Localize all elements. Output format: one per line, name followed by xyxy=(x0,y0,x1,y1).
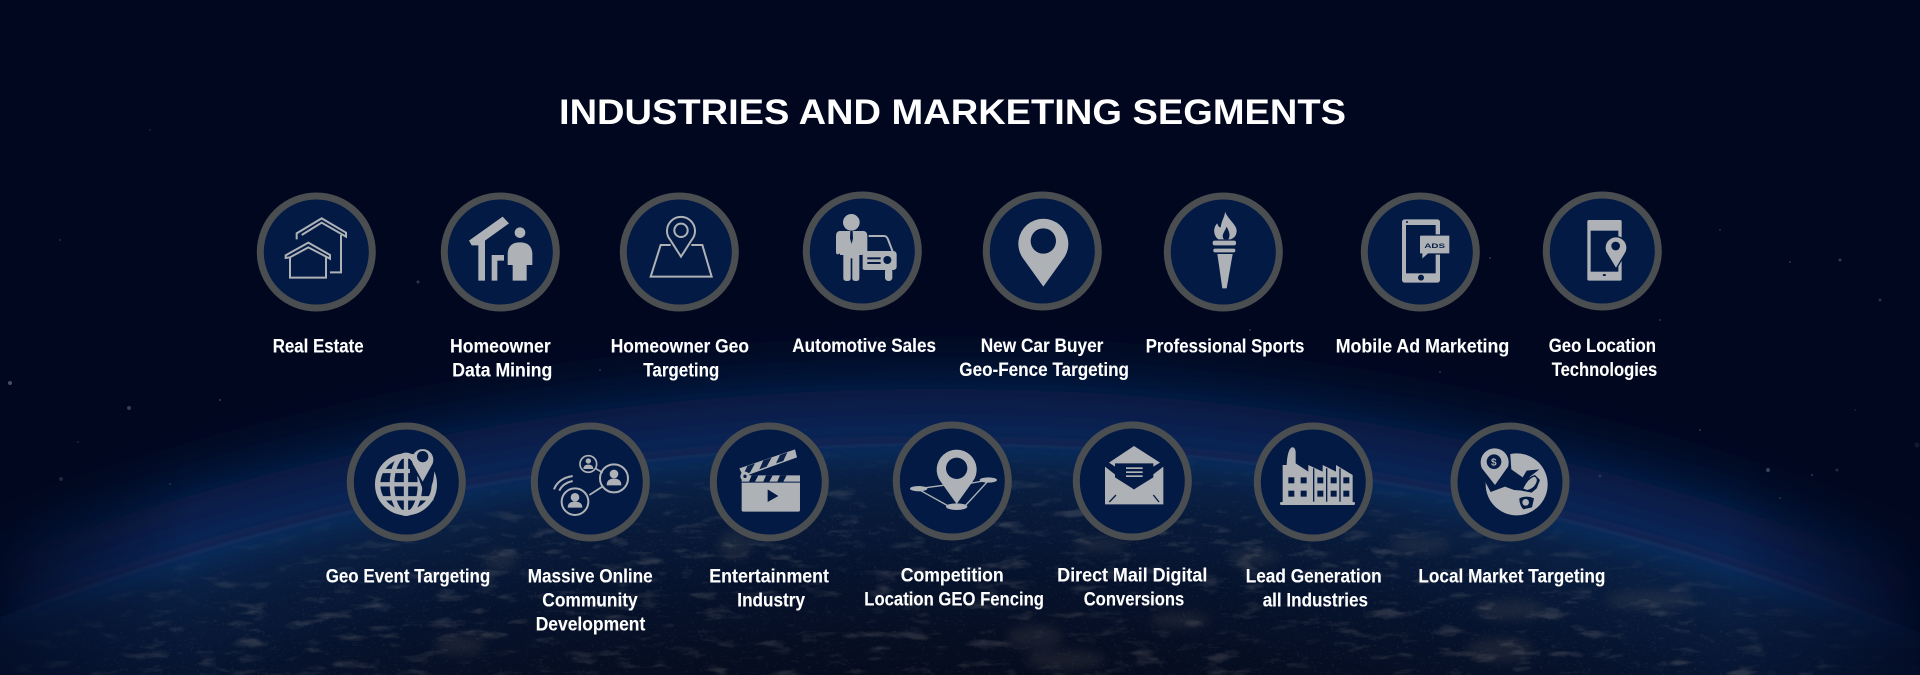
label: Competition xyxy=(901,566,1004,587)
icon: globe with dollar pin xyxy=(1479,448,1548,515)
background: bright land patches xyxy=(435,531,1695,670)
label xyxy=(959,336,1129,381)
icon ring xyxy=(1454,426,1566,538)
icon: connected people xyxy=(554,456,628,515)
item: Competition Location GEO Fencing xyxy=(864,425,1044,611)
background: earth xyxy=(0,443,1920,675)
icon: map pin on map xyxy=(651,217,712,277)
item: Automotive Sales xyxy=(792,195,936,357)
label xyxy=(1549,336,1657,381)
icon: clapperboard xyxy=(739,449,800,512)
item: Lead Generation all Industries xyxy=(1246,426,1382,612)
icon: house and person xyxy=(469,217,532,281)
icon: phone with pin xyxy=(1587,220,1627,281)
background: horizon haze xyxy=(0,441,1920,631)
item: Geo Location Technologies xyxy=(1546,195,1658,381)
icon ring xyxy=(1167,196,1279,308)
label xyxy=(709,567,830,612)
item: Homeowner Geo Targeting xyxy=(611,196,749,382)
label: Homeowner Geo xyxy=(611,337,749,358)
label: Geo Location xyxy=(1549,336,1656,357)
icon ring xyxy=(806,195,918,307)
label: Industry xyxy=(737,591,805,612)
item: Mobile Ad Marketing xyxy=(1336,196,1509,358)
icon ring xyxy=(623,196,735,308)
item: Local Market Targeting xyxy=(1418,426,1605,588)
icon: phone with ads bubble xyxy=(1402,219,1450,283)
label: Local Market Targeting xyxy=(1418,567,1605,588)
label xyxy=(864,566,1044,611)
background: stars xyxy=(8,129,1920,499)
label: Technologies xyxy=(1552,360,1657,381)
item: New Car Buyer Geo-Fence Targeting xyxy=(959,195,1129,381)
item: Direct Mail Digital Conversions xyxy=(1057,425,1207,611)
label: Mobile Ad Marketing xyxy=(1336,337,1509,358)
icon ring xyxy=(1257,426,1369,538)
icon ring xyxy=(534,426,646,538)
label xyxy=(611,337,749,382)
icon ring xyxy=(986,195,1098,307)
label: New Car Buyer xyxy=(981,336,1104,357)
icon ring xyxy=(1364,196,1476,308)
label: Professional Sports xyxy=(1146,337,1304,358)
label: Direct Mail Digital xyxy=(1057,566,1207,587)
icon ring xyxy=(1076,425,1188,537)
label: Geo Event Targeting xyxy=(326,567,490,588)
icon: houses xyxy=(286,218,346,278)
item: Homeowner Data Mining xyxy=(444,196,556,382)
item: Entertainment Industry xyxy=(709,426,830,612)
label xyxy=(1246,567,1382,612)
label: Data Mining xyxy=(452,361,552,382)
item: Massive Online Community Development xyxy=(528,426,653,636)
title: INDUSTRIES AND MARKETING SEGMENTS xyxy=(559,93,1346,132)
icon ring xyxy=(350,426,462,538)
label: Conversions xyxy=(1084,590,1184,611)
icon ring xyxy=(1546,195,1658,307)
icon: pin with geofence points xyxy=(910,450,997,510)
label: all Industries xyxy=(1263,591,1368,612)
label: Real Estate xyxy=(273,337,364,358)
label: Community xyxy=(542,591,638,612)
label: Automotive Sales xyxy=(792,336,936,357)
item: Real Estate xyxy=(260,196,372,358)
background: city lights xyxy=(49,470,1836,675)
label: Location GEO Fencing xyxy=(864,590,1044,611)
icon: globe with dollar pin: $ xyxy=(1491,457,1497,468)
icon: torch xyxy=(1213,212,1237,288)
icon: open envelope xyxy=(1105,446,1163,504)
background: atmosphere glow xyxy=(0,417,1920,605)
label: Development xyxy=(536,615,646,636)
label: Targeting xyxy=(643,361,719,382)
item: Geo Event Targeting xyxy=(326,426,490,588)
label: Homeowner xyxy=(450,337,551,358)
icon: globe with pin xyxy=(377,449,435,514)
icon ring xyxy=(444,196,556,308)
label xyxy=(1057,566,1207,611)
icon ring xyxy=(260,196,372,308)
icon: factory xyxy=(1280,447,1355,505)
icon ring xyxy=(896,425,1008,537)
icon: location pin xyxy=(1018,219,1068,287)
label: Lead Generation xyxy=(1246,567,1382,588)
icon ring xyxy=(713,426,825,538)
background: side vignette xyxy=(0,400,1920,675)
item: Professional Sports xyxy=(1146,196,1304,358)
label: Entertainment xyxy=(709,567,830,588)
label xyxy=(450,337,552,382)
label xyxy=(528,567,653,636)
icon: salesman and car xyxy=(836,214,897,281)
label: Geo-Fence Targeting xyxy=(959,360,1129,381)
icon: phone with ads bubble: ADS xyxy=(1424,243,1446,250)
label: Massive Online xyxy=(528,567,653,588)
